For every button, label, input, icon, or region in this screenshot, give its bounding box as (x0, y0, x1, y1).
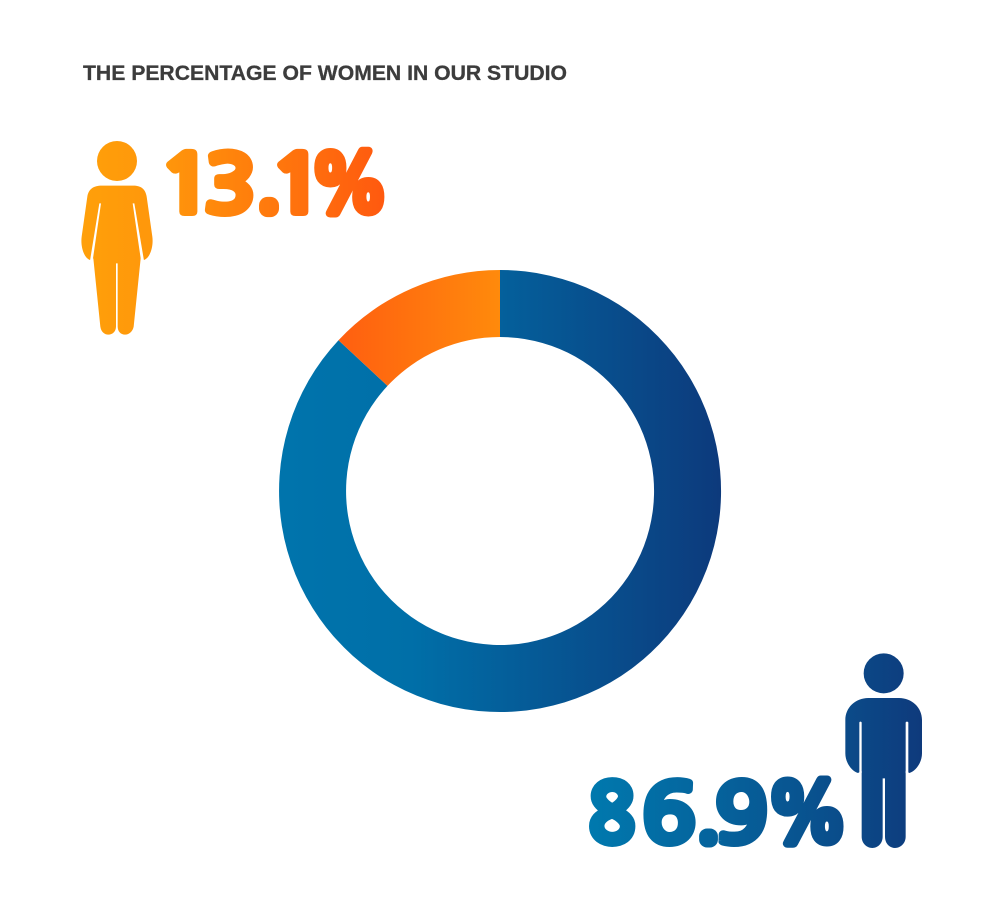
percentage: women: 3 (204, 146, 257, 224)
segment: men 86.9% (279, 270, 721, 712)
percentage: women: . (266, 191, 272, 213)
donut chart (279, 270, 721, 712)
title: THE PERCENTAGE OF WOMEN IN OUR STUDIO (83, 62, 567, 85)
percentage: men: 9 (715, 775, 768, 855)
percentage: women: 1 (158, 146, 214, 224)
percentage: women (158, 146, 390, 224)
percentage: men: . (706, 822, 711, 844)
icon: woman (81, 141, 153, 335)
percentage: women: 1 (269, 146, 325, 224)
percentage: men: % (766, 775, 849, 855)
percentage: men (588, 775, 849, 855)
segment: women 13.1% (338, 270, 500, 386)
percentage: men: 8 (588, 775, 635, 855)
icon: man (845, 653, 922, 848)
percentage: women: % (309, 146, 390, 224)
percentage: men: 6 (642, 775, 696, 855)
